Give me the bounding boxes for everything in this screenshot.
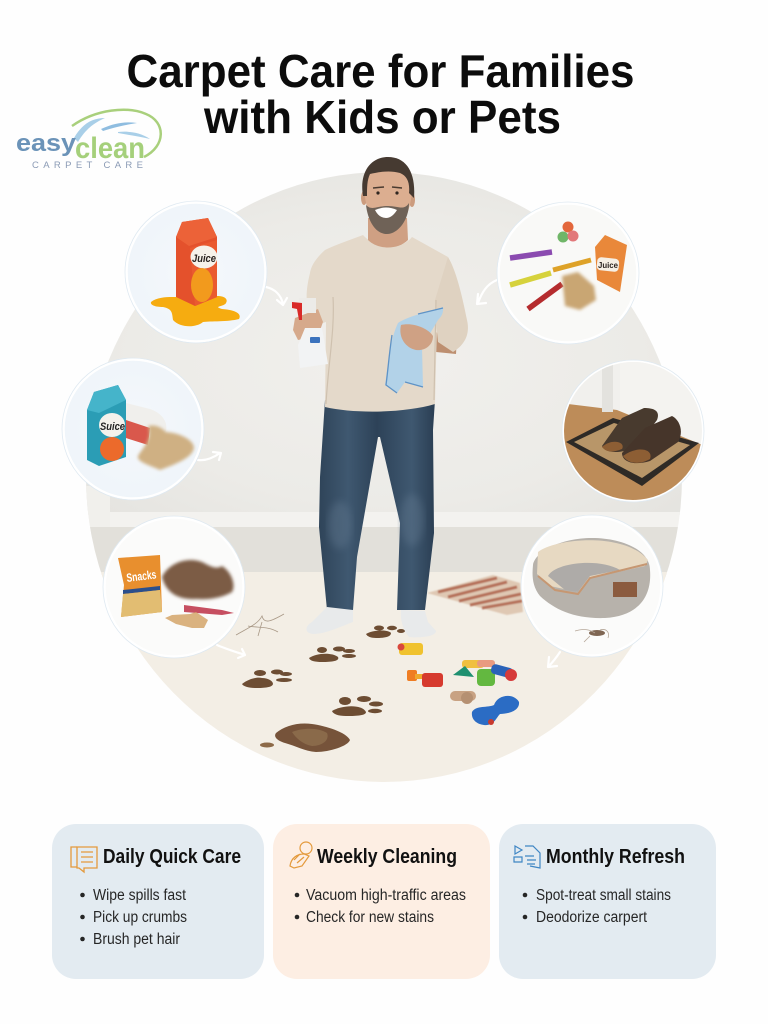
man [292, 157, 468, 637]
logo: easyclean carpet care: easy [16, 130, 77, 157]
left hand [293, 309, 323, 340]
callout: snacks, pet hair, crayon [103, 516, 245, 658]
arrows [198, 280, 560, 667]
panel: monthly refresh: Monthly Refresh [546, 846, 685, 868]
striped rug [427, 575, 523, 615]
right hand [400, 324, 433, 350]
panel: daily quick care: Pick up crumbs [93, 909, 187, 926]
panel: daily quick care: Daily Quick Care [103, 846, 241, 868]
wall [80, 170, 690, 515]
callout: crayons, cereal, juice box [497, 202, 639, 344]
panel: weekly cleaning [273, 824, 490, 979]
socks [306, 607, 353, 634]
logo: easyclean carpet care: CARPET CARE [32, 160, 143, 171]
callout: pet bed [521, 515, 663, 657]
right forearm [423, 330, 457, 354]
floor [80, 527, 690, 577]
mud puddle [260, 723, 350, 752]
panel: weekly cleaning: Weekly Cleaning [317, 846, 457, 868]
jeans [319, 400, 435, 610]
callout: juice and spilled cereal [62, 358, 204, 500]
title [126, 45, 634, 143]
icon: hand with sponge [290, 842, 312, 868]
logo: easyclean carpet care: clean [75, 132, 145, 165]
title: Carpet Care for Families [126, 45, 634, 97]
panel: daily quick care [52, 824, 264, 979]
panel: weekly cleaning: Check for new stains [306, 909, 434, 926]
callout: snacks, pet hair, crayon: Snacks [126, 567, 157, 585]
neck [368, 218, 408, 248]
callout: spilled juice [125, 201, 267, 343]
panel: monthly refresh: Deodorize carpert [536, 909, 648, 926]
panel: monthly refresh [499, 824, 716, 979]
panel: daily quick care: Wipe spills fast [93, 887, 187, 904]
callout: muddy shoes on doormat [560, 360, 705, 505]
sweater [307, 235, 448, 412]
callout: spilled juice: Juice [192, 253, 216, 265]
callout: crayons, cereal, juice box: Juice [598, 261, 619, 270]
panel: monthly refresh: Spot-treat small stains [536, 887, 671, 904]
spray bottle [298, 328, 328, 368]
head [361, 157, 415, 234]
paw prints and stain [242, 626, 405, 752]
panel: weekly cleaning: Vacuom high-traffic areas [306, 887, 466, 904]
panel: daily quick care: Brush pet hair [93, 931, 180, 948]
title: with Kids or Pets [203, 91, 561, 143]
hair strand on carpet [236, 614, 284, 636]
carpet [80, 572, 690, 787]
callout: juice and spilled cereal: Suice [100, 421, 125, 433]
central scene circle [80, 170, 690, 787]
icon: spray bottle and sparkles [514, 846, 540, 868]
logo: easyclean carpet care [16, 110, 161, 171]
blue cloth [385, 307, 443, 393]
icon: checklist speech bubble [71, 847, 97, 872]
toys [398, 643, 519, 725]
